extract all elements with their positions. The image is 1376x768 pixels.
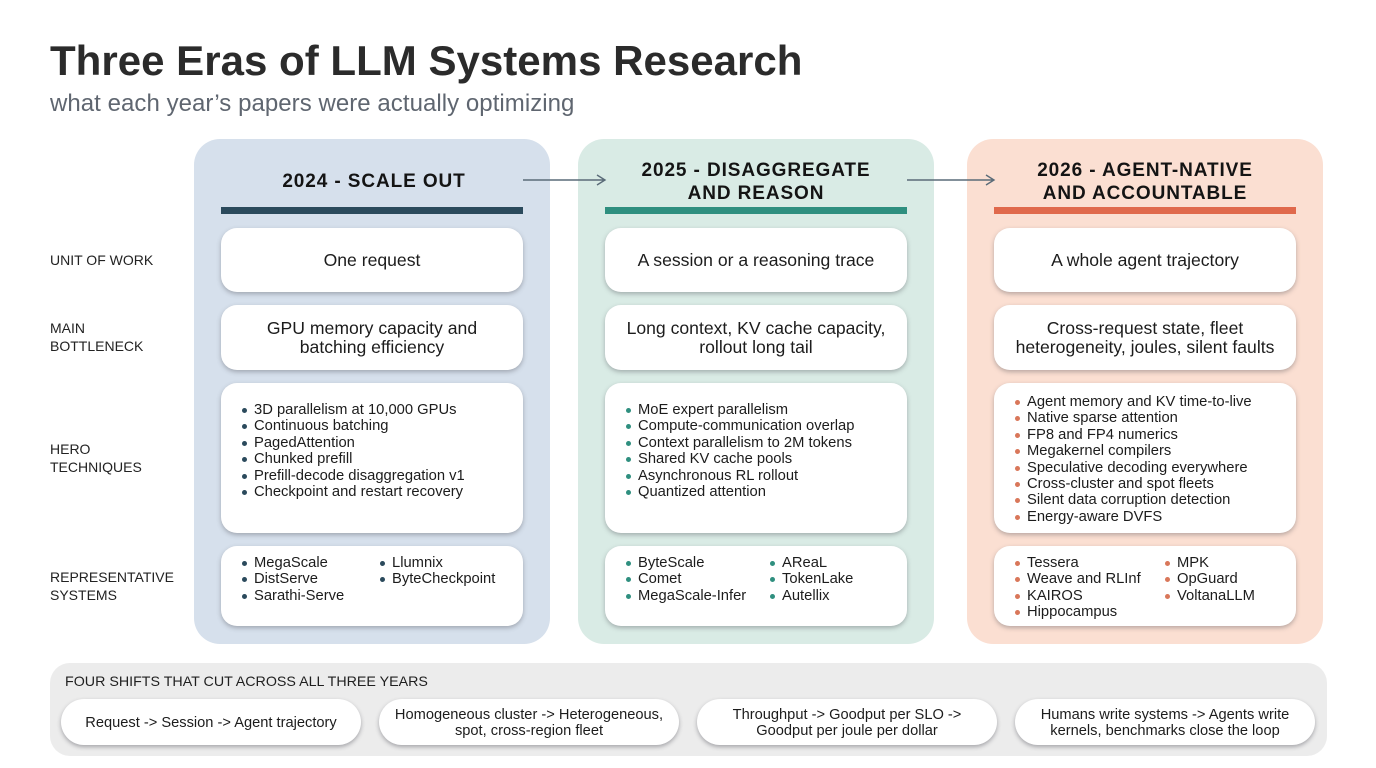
heading: 2026: 2026 - AGENT-NATIVE bbox=[1037, 160, 1253, 181]
card: 2026 representative systems: Weave and RLInf bbox=[1027, 571, 1141, 587]
card: 2026 representative systems: Hippocampus bbox=[1027, 604, 1117, 620]
card: 2025 bottleneck: Long context, KV cache capacity, bbox=[627, 318, 885, 338]
card: 2024 hero techniques: Continuous batching bbox=[254, 418, 388, 434]
pill: humans to agents: Humans write systems -> Agents write bbox=[1041, 707, 1289, 723]
pill: humans to agents: kernels, benchmarks close the loop bbox=[1050, 723, 1280, 739]
row label: main bottleneck: BOTTLENECK bbox=[50, 338, 143, 354]
card: 2024 bottleneck bbox=[221, 305, 523, 370]
card: 2025 bottleneck bbox=[605, 305, 907, 370]
card: 2024 hero techniques: Checkpoint and restart recovery bbox=[254, 484, 463, 500]
card: 2025 hero techniques bbox=[605, 383, 907, 533]
card: 2025 hero techniques: MoE expert parallelism bbox=[638, 402, 788, 418]
card: 2024 unit of work bbox=[221, 228, 523, 292]
card: 2026 hero techniques: Energy-aware DVFS bbox=[1027, 509, 1162, 525]
card: 2026 hero techniques: Cross-cluster and spot fleets bbox=[1027, 476, 1214, 492]
row label: hero techniques bbox=[50, 441, 142, 475]
card: 2025 representative systems: AReaL bbox=[782, 555, 827, 571]
panel: 2024 bbox=[194, 139, 550, 644]
heading: 2025: AND REASON bbox=[688, 182, 824, 204]
card: 2026 representative systems: Tessera bbox=[1027, 555, 1079, 571]
card: 2024 hero techniques: PagedAttention bbox=[254, 435, 355, 451]
card: 2025 representative systems: Autellix bbox=[782, 588, 830, 604]
accent bar: 2026 bbox=[994, 207, 1296, 214]
card: 2025 bottleneck: rollout long tail bbox=[699, 337, 813, 357]
card: 2026 hero techniques: Silent data corruption detection bbox=[1027, 492, 1230, 508]
row label: representative systems: SYSTEMS bbox=[50, 587, 117, 603]
arrow: 2024 to 2025 bbox=[523, 174, 606, 186]
card: 2026 representative systems: MPK bbox=[1177, 555, 1209, 571]
card: 2025 hero techniques: Context parallelism to 2M tokens bbox=[638, 435, 852, 451]
card: 2025 representative systems: MegaScale-Infer bbox=[638, 588, 746, 604]
card: 2026 bottleneck: Cross-request state, fleet bbox=[1047, 318, 1243, 338]
card: 2025 representative systems: Comet bbox=[638, 571, 681, 587]
card: 2024 hero techniques: 3D parallelism at 10,000 GPUs bbox=[254, 402, 456, 418]
heading: four shifts: FOUR SHIFTS THAT CUT ACROSS ALL THREE YEARS bbox=[65, 674, 428, 690]
card: 2025 representative systems: TokenLake bbox=[782, 571, 853, 587]
card: 2024 unit of work: One request bbox=[324, 250, 420, 270]
row label: hero techniques: HERO bbox=[50, 441, 90, 457]
row label: unit of work: UNIT OF WORK bbox=[50, 252, 153, 268]
card: 2026 hero techniques bbox=[994, 383, 1296, 533]
pill: homogeneous to heterogeneous: Homogeneous cluster -> Heterogeneous, bbox=[395, 707, 663, 723]
card: 2026 hero techniques: Agent memory and KV time-to-live bbox=[1027, 394, 1252, 410]
card: 2024 hero techniques: Chunked prefill bbox=[254, 451, 352, 467]
pill: request to agent trajectory: Request -> Session -> Agent trajectory bbox=[85, 715, 337, 731]
arrow: 2025 to 2026 bbox=[907, 174, 996, 186]
card: 2025 unit of work bbox=[605, 228, 907, 292]
heading: 2026 bbox=[1037, 160, 1253, 204]
row label: main bottleneck: MAIN bbox=[50, 320, 85, 336]
card: 2026 representative systems: VoltanaLLM bbox=[1177, 588, 1255, 604]
accent bar: 2025 bbox=[605, 207, 907, 214]
card: 2025 hero techniques: Compute-communication overlap bbox=[638, 418, 854, 434]
card: 2025 unit of work: A session or a reasoning trace bbox=[638, 250, 874, 270]
accent bar: 2024 bbox=[221, 207, 523, 214]
pill: homogeneous to heterogeneous: spot, cross-region fleet bbox=[455, 723, 603, 739]
subtitle: what each year’s papers were actually optimizing bbox=[50, 90, 574, 117]
row label: main bottleneck bbox=[50, 320, 144, 354]
card: 2024 representative systems: MegaScale bbox=[254, 555, 328, 571]
card: 2026 bottleneck bbox=[994, 305, 1296, 370]
row label: representative systems: REPRESENTATIVE bbox=[50, 569, 174, 585]
pill: throughput to goodput: Goodput per joule per dollar bbox=[756, 723, 938, 739]
card: 2026 unit of work bbox=[994, 228, 1296, 292]
card: 2026 bottleneck: heterogeneity, joules, silent faults bbox=[1016, 337, 1274, 357]
card: 2025 representative systems: ByteScale bbox=[638, 555, 704, 571]
card: 2026 hero techniques: Megakernel compilers bbox=[1027, 443, 1171, 459]
card: 2024 representative systems: ByteCheckpoint bbox=[392, 571, 495, 587]
heading: 2025 bbox=[642, 160, 870, 204]
card: 2024 representative systems: DistServe bbox=[254, 571, 318, 587]
panel: 2025 bbox=[578, 139, 934, 644]
card: 2026 hero techniques: FP8 and FP4 numerics bbox=[1027, 427, 1178, 443]
card: 2026 hero techniques: Speculative decoding everywhere bbox=[1027, 460, 1248, 476]
panel: 2026 bbox=[967, 139, 1323, 644]
card: 2025 hero techniques: Shared KV cache pools bbox=[638, 451, 792, 467]
card: 2026 representative systems: OpGuard bbox=[1177, 571, 1238, 587]
card: 2026 representative systems: KAIROS bbox=[1027, 588, 1083, 604]
pill: throughput to goodput: Throughput -> Goodput per SLO -> bbox=[733, 707, 961, 723]
heading: 2026: AND ACCOUNTABLE bbox=[1043, 182, 1247, 204]
card: 2026 unit of work: A whole agent trajectory bbox=[1051, 250, 1239, 270]
card: 2024 bottleneck: batching efficiency bbox=[300, 337, 444, 357]
pill: throughput to goodput bbox=[697, 699, 997, 745]
card: 2024 representative systems: Llumnix bbox=[392, 555, 443, 571]
card: 2025 representative systems bbox=[605, 546, 907, 626]
card: 2025 hero techniques: Asynchronous RL rollout bbox=[638, 468, 798, 484]
card: 2026 representative systems bbox=[994, 546, 1296, 626]
pill: homogeneous to heterogeneous bbox=[379, 699, 679, 745]
pill: humans to agents bbox=[1015, 699, 1315, 745]
heading: 2024: 2024 - SCALE OUT bbox=[282, 171, 466, 192]
card: 2024 representative systems: Sarathi-Serve bbox=[254, 588, 344, 604]
card: 2025 hero techniques: Quantized attention bbox=[638, 484, 766, 500]
heading: 2025: 2025 - DISAGGREGATE bbox=[642, 160, 870, 181]
card: 2024 hero techniques: Prefill-decode disaggregation v1 bbox=[254, 468, 465, 484]
pill: request to agent trajectory bbox=[61, 699, 361, 745]
card: 2024 representative systems bbox=[221, 546, 523, 626]
card: 2024 bottleneck: GPU memory capacity and bbox=[267, 318, 477, 338]
title: Three Eras of LLM Systems Research bbox=[50, 37, 802, 84]
row label: representative systems bbox=[50, 569, 174, 603]
card: 2026 hero techniques: Native sparse attention bbox=[1027, 410, 1178, 426]
card: 2024 hero techniques bbox=[221, 383, 523, 533]
row label: hero techniques: TECHNIQUES bbox=[50, 459, 142, 475]
panel: four shifts bbox=[50, 663, 1327, 756]
